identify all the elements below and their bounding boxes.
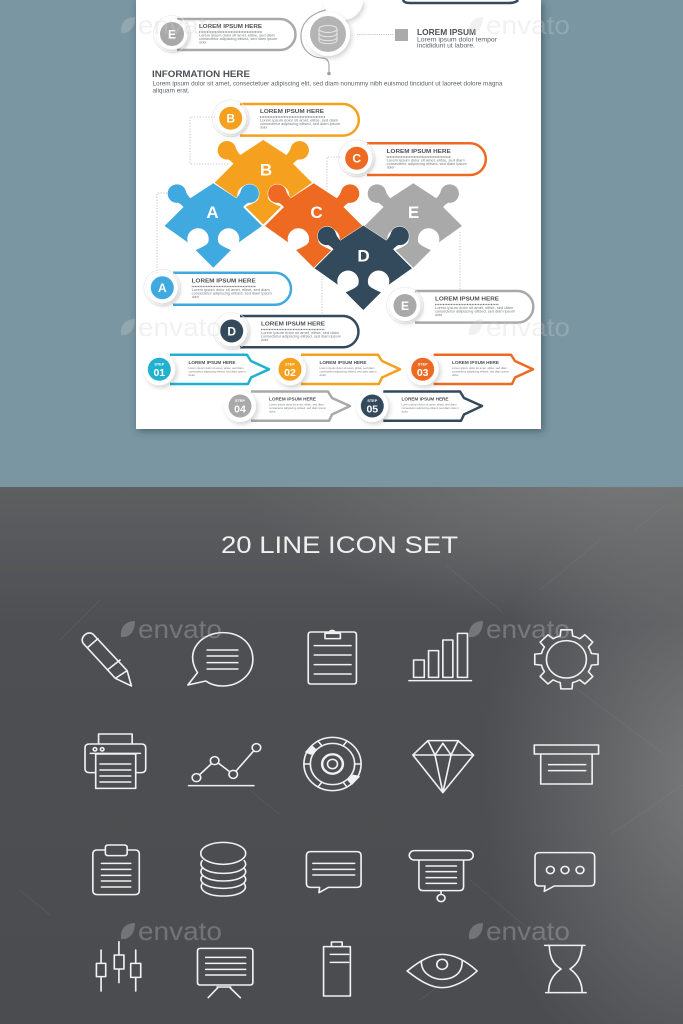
icon: speech bubble <box>188 633 253 686</box>
callout: top E: Lorem ipsum dolor sit amet, elitse, sed diam <box>199 34 275 38</box>
text block: lorem ipsum: Lorem ipsum dolor tempor <box>417 38 497 44</box>
dashed connector to square <box>357 34 394 36</box>
callout: lower E: dolor <box>435 313 443 317</box>
watermark lower left: envato <box>138 916 222 946</box>
icon: eye <box>407 954 477 988</box>
callout: D: Lorem ipsum dolor sit amet, elitse, sed diam <box>261 331 339 335</box>
icon: typing bubble <box>535 853 595 891</box>
icon: sliders <box>96 942 141 991</box>
step 05: consectetur adipiscing elitsed, sed diam ipsum <box>402 406 459 410</box>
icon: poker chip <box>304 737 361 791</box>
callout: B: Lorem ipsum dolor sit amet, elitse, sed diam <box>260 118 338 122</box>
text block: lorem ipsum: LOREM IPSUM <box>417 28 476 37</box>
icon: line chart <box>189 744 261 786</box>
step 02: 02 <box>284 367 296 379</box>
puzzle piece A <box>164 183 262 268</box>
icon: diamond <box>413 741 474 793</box>
callout: A <box>144 269 291 306</box>
callout: top E: E <box>168 28 176 42</box>
step 01 <box>143 353 269 385</box>
step 02: dolor <box>320 373 326 377</box>
watermark mid right: envato <box>486 312 570 342</box>
text block: information body: aliquam erat. <box>152 88 190 94</box>
puzzle piece D <box>314 225 412 310</box>
step 01: Lorem ipsum dolor sit amet, elitse, sed diam <box>188 366 244 370</box>
callout: top E <box>154 16 295 52</box>
step 04: LOREM IPSUM HERE <box>269 396 316 402</box>
watermark top left: envato <box>138 10 222 40</box>
step 05: Lorem ipsum dolor sit amet, elitse, sed diam <box>402 402 457 406</box>
puzzle piece E: E <box>408 203 419 222</box>
step 04: STEP <box>235 399 245 403</box>
step 03: dolor <box>452 373 459 377</box>
icon row 3 and 4 <box>93 842 595 998</box>
watermark icons right: envato <box>486 614 570 644</box>
callout: lower E: Lorem ipsum dolor sit amet, elitse, sed diam <box>435 306 513 310</box>
callout: C: consectetur adipiscing elitsed, sed diam ipsum <box>387 162 467 166</box>
printer lights <box>93 748 104 751</box>
puzzle piece B: B <box>260 160 272 180</box>
step 01: LOREM IPSUM HERE <box>188 360 236 365</box>
icon: gear <box>535 630 598 689</box>
watermark icons left: envato <box>138 614 222 644</box>
icon: projector screen <box>409 851 473 902</box>
step 03: consectetur adipiscing elitsed, sed diam ipsum <box>452 370 509 374</box>
step 01: dolor <box>188 373 195 377</box>
icon: bar chart <box>409 633 471 681</box>
step 02: Lorem ipsum dolor sit amet, elitse, sed diam <box>320 366 375 370</box>
puzzle piece B <box>214 140 312 225</box>
watermark top right: envato <box>486 10 570 40</box>
callout: B: B <box>226 112 235 126</box>
step 02: STEP <box>285 362 295 366</box>
step 05 <box>356 390 482 422</box>
text block: information body: Lorem ipsum dolor sit amet, consectetuer adipiscing elit, sed diam nonummy nibh euismod tincidunt ut laoreet dolore magna <box>152 82 503 88</box>
callout: C: dolor <box>387 166 395 170</box>
callout: A: A <box>158 281 167 295</box>
icon: printer <box>85 734 146 788</box>
icon: pencil <box>82 633 131 686</box>
callout: lower E: LOREM IPSUM HERE <box>435 296 499 302</box>
text block: information body <box>152 82 503 94</box>
icon: clipboard <box>308 630 356 684</box>
callout: A: LOREM IPSUM HERE <box>192 278 256 284</box>
icon: database circle <box>306 12 350 56</box>
step 01: consectetur adipiscing elitsed, sed diam ipsum <box>188 370 246 374</box>
icon: top cropped circle <box>323 0 363 20</box>
puzzle piece C: C <box>310 203 323 222</box>
callout: A: dolor <box>192 295 200 299</box>
step 04: Lorem ipsum dolor sit amet, elitse, sed diam <box>269 402 324 406</box>
icon: hourglass <box>545 945 586 993</box>
icon: box <box>534 745 599 784</box>
background: dark icon panel <box>0 487 683 1024</box>
step 03: 03 <box>417 367 429 379</box>
step 03: Lorem ipsum dolor sit amet, elitse, sed diam <box>452 366 507 370</box>
callout: C: Lorem ipsum dolor sit amet, elitse, sed diam <box>387 158 465 162</box>
callout: B <box>212 100 359 137</box>
callout: B: consectetur adipiscing elitsed, sed diam ipsum <box>260 122 340 126</box>
text block: lorem ipsum: incididunt ut labore. <box>417 44 475 50</box>
watermark lower right: envato <box>486 916 570 946</box>
step 04: 04 <box>234 404 246 416</box>
step 01: 01 <box>153 367 165 379</box>
step 04 <box>224 390 350 422</box>
title: 20 line icon set: 20 LINE ICON SET <box>221 532 458 559</box>
callout: C: LOREM IPSUM HERE <box>387 149 451 155</box>
S-curve connector <box>301 8 343 73</box>
step 04: consectetur adipiscing elitsed, sed diam ipsum <box>269 406 326 410</box>
callout: D: consectetur adipiscing elitsed, sed diam ipsum <box>261 334 341 338</box>
callout: D <box>213 312 358 350</box>
callout: B: dolor <box>260 126 268 130</box>
step 02: consectetur adipiscing elitsed, sed diam ipsum <box>320 370 377 374</box>
connector end dot <box>327 72 331 75</box>
puzzle piece E <box>364 183 462 268</box>
puzzle piece A: A <box>206 203 219 222</box>
icon: presentation board <box>197 948 253 998</box>
step 04: dolor <box>269 410 276 414</box>
callout: D: dolor <box>261 338 269 342</box>
heading: information here: INFORMATION HERE <box>152 69 250 79</box>
step 01: STEP <box>154 362 165 366</box>
top cropped pill <box>403 0 518 3</box>
panel: white infographic sheet <box>136 0 541 429</box>
step 03: LOREM IPSUM HERE <box>452 360 499 365</box>
puzzle piece C <box>265 183 363 268</box>
step 03 <box>407 353 533 385</box>
step 05: STEP <box>367 399 378 403</box>
icon: message rectangle <box>306 852 361 893</box>
text block: lorem ipsum <box>417 28 497 50</box>
puzzle piece D: D <box>357 246 370 266</box>
callout: D: D <box>227 324 236 338</box>
step 05: LOREM IPSUM HERE <box>402 396 449 402</box>
callout: C <box>338 140 486 177</box>
watermarks <box>121 10 570 946</box>
callout: B: LOREM IPSUM HERE <box>260 109 324 115</box>
step 05: 05 <box>366 404 378 416</box>
background: slate top area <box>0 0 683 487</box>
step 05: dolor <box>402 410 408 414</box>
chart: puzzle pieces <box>164 140 462 310</box>
callout: top E: consectetur adipiscing elitsed, sed diam ipsum <box>199 37 277 41</box>
step 03: STEP <box>418 362 428 366</box>
watermark mid left: envato <box>138 312 222 342</box>
icon row 1 and 2 <box>82 630 599 793</box>
callout: D: LOREM IPSUM HERE <box>261 322 325 328</box>
callout: top E: LOREM IPSUM HERE <box>199 24 262 30</box>
step 02: LOREM IPSUM HERE <box>320 360 367 365</box>
callout: lower E: E <box>401 299 409 313</box>
step 02 <box>274 353 400 385</box>
icon: battery <box>324 942 350 996</box>
icon: small clipboard <box>93 845 139 895</box>
icon: database <box>201 842 246 896</box>
dashed connectors around puzzle <box>157 117 460 316</box>
callout: lower E: consectetur adipiscing elitsed, sed diam ipsum <box>435 310 515 314</box>
callout: A: consectetur adipiscing elitsed, sed diam ipsum <box>192 292 272 296</box>
watermark leaves <box>121 17 483 939</box>
callout: A: Lorem ipsum dolor sit amet, elitse, sed diam <box>192 288 270 292</box>
callout: C: C <box>352 152 361 166</box>
icon: grey square <box>395 29 408 41</box>
callout: top E: dolor <box>199 40 207 44</box>
callout: lower E <box>386 287 533 324</box>
